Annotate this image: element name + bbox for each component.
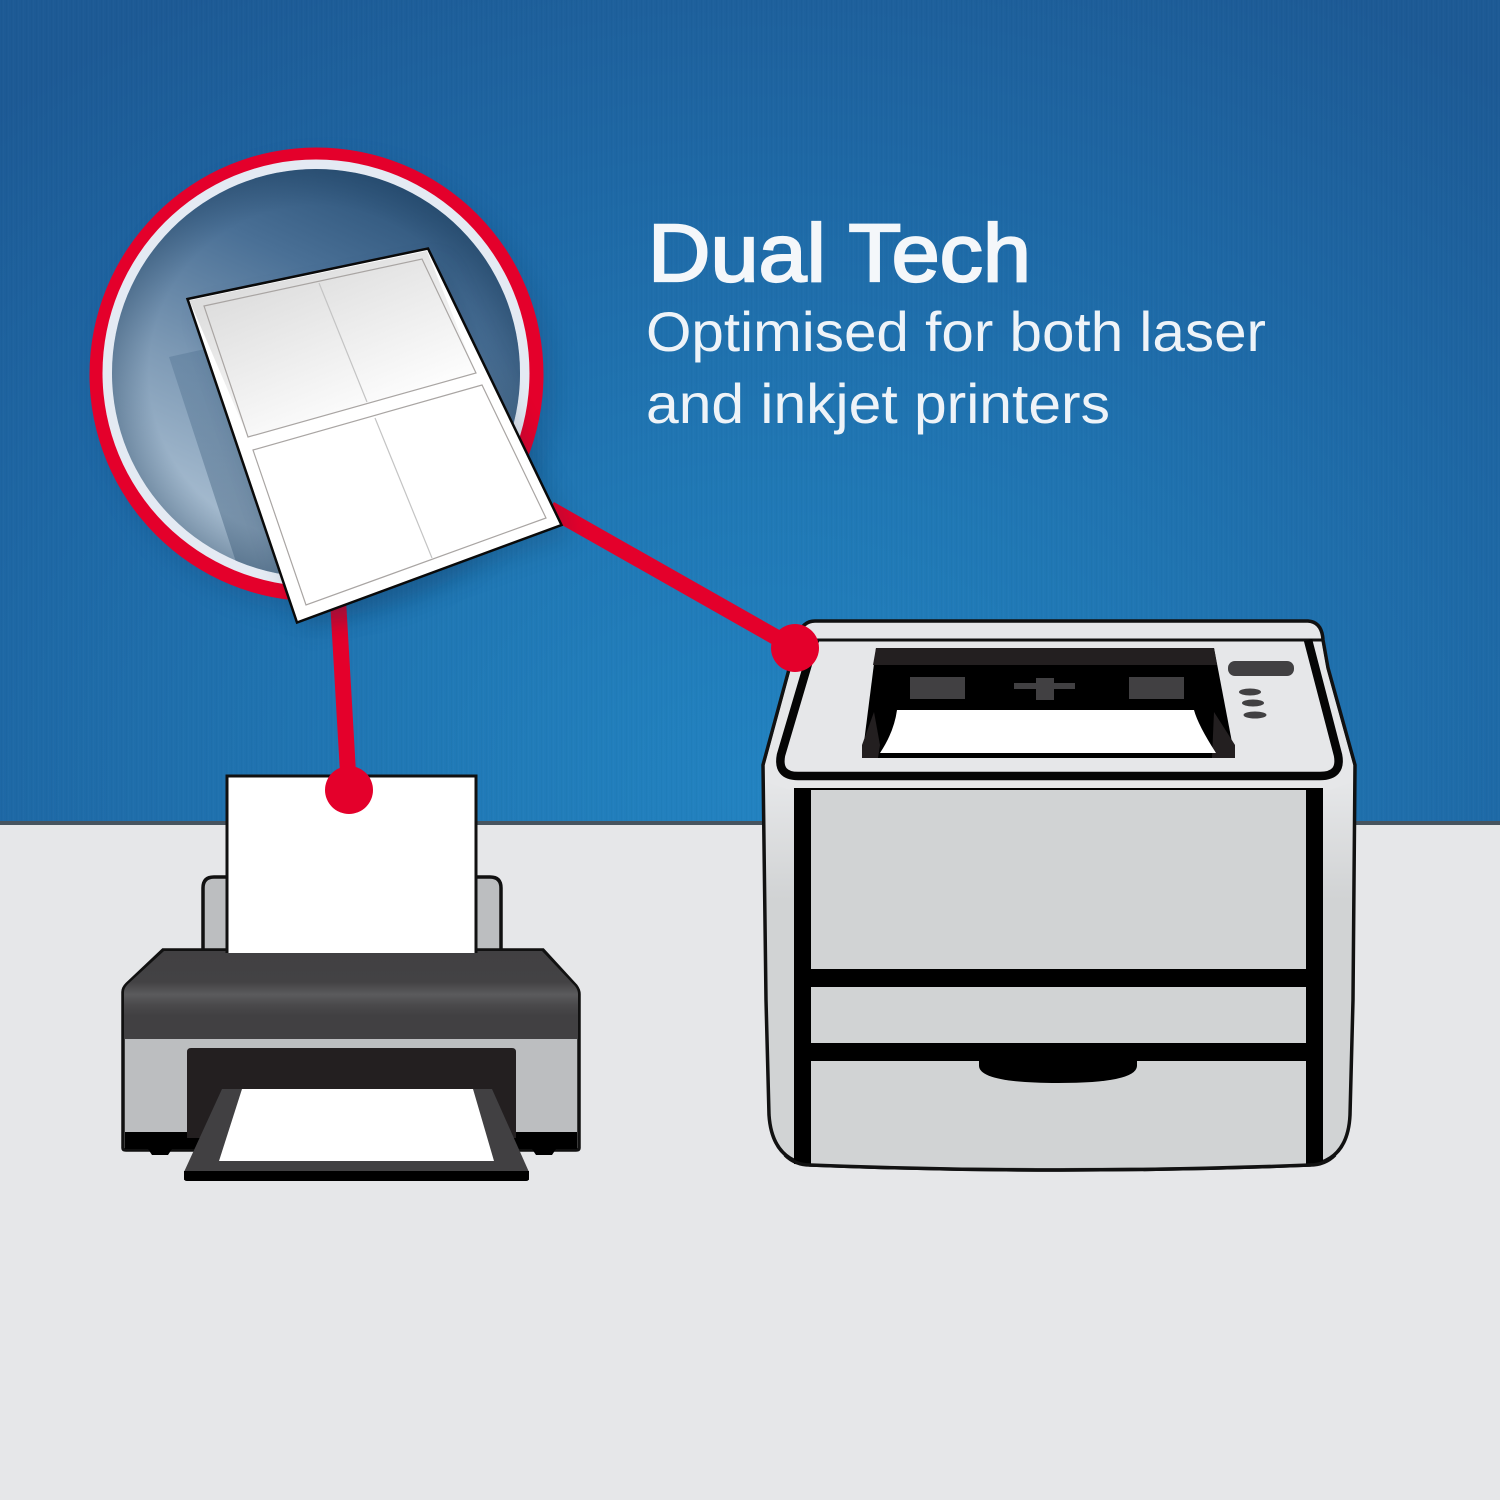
lid seam bbox=[800, 638, 1323, 642]
sheet drop shadow bbox=[200, 262, 572, 632]
title: Dual Tech: Dual Tech bbox=[648, 208, 1031, 299]
front panels bbox=[794, 788, 1323, 1168]
printer dark top cover bbox=[124, 951, 578, 1039]
loaded paper bbox=[227, 776, 476, 953]
lens bbox=[112, 169, 520, 577]
callout shadow bbox=[100, 160, 556, 616]
subtitle text bbox=[646, 300, 1266, 435]
top label outline bbox=[204, 259, 476, 437]
bottom edge bbox=[785, 1155, 1335, 1170]
connector dot on paper bbox=[325, 766, 373, 814]
subtitle text: Optimised for both laser bbox=[646, 300, 1266, 363]
label sheet bbox=[188, 248, 562, 622]
white ring bbox=[102, 160, 530, 586]
lens vignette bbox=[112, 169, 520, 577]
rear paper support bbox=[203, 877, 501, 952]
connector line to inkjet printer bbox=[338, 600, 349, 790]
laser printer bbox=[763, 621, 1355, 1170]
paper output window bbox=[862, 648, 1235, 758]
laser printer body bbox=[763, 621, 1355, 1170]
inkjet printer bbox=[123, 766, 579, 1181]
output tray bbox=[184, 1089, 529, 1181]
magnifier callout bbox=[90, 148, 572, 632]
printer base bbox=[123, 950, 579, 1150]
red ring bbox=[90, 148, 544, 602]
light grey desk surface bbox=[0, 821, 1500, 1500]
connector line to laser printer bbox=[550, 509, 819, 672]
control panel buttons bbox=[1239, 688, 1266, 718]
paper tray handle bbox=[979, 1060, 1137, 1083]
subtitle text: and inkjet printers bbox=[646, 372, 1110, 435]
black base strip with feet bbox=[125, 1132, 577, 1155]
top panel rim bbox=[780, 640, 1339, 776]
blue background wall bbox=[0, 0, 1500, 824]
laser printer top panel bbox=[765, 623, 1353, 790]
bottom label outline bbox=[253, 385, 546, 605]
output slot bbox=[187, 1048, 516, 1138]
control panel display bbox=[1228, 661, 1294, 676]
sheet shadow in lens bbox=[169, 350, 279, 574]
